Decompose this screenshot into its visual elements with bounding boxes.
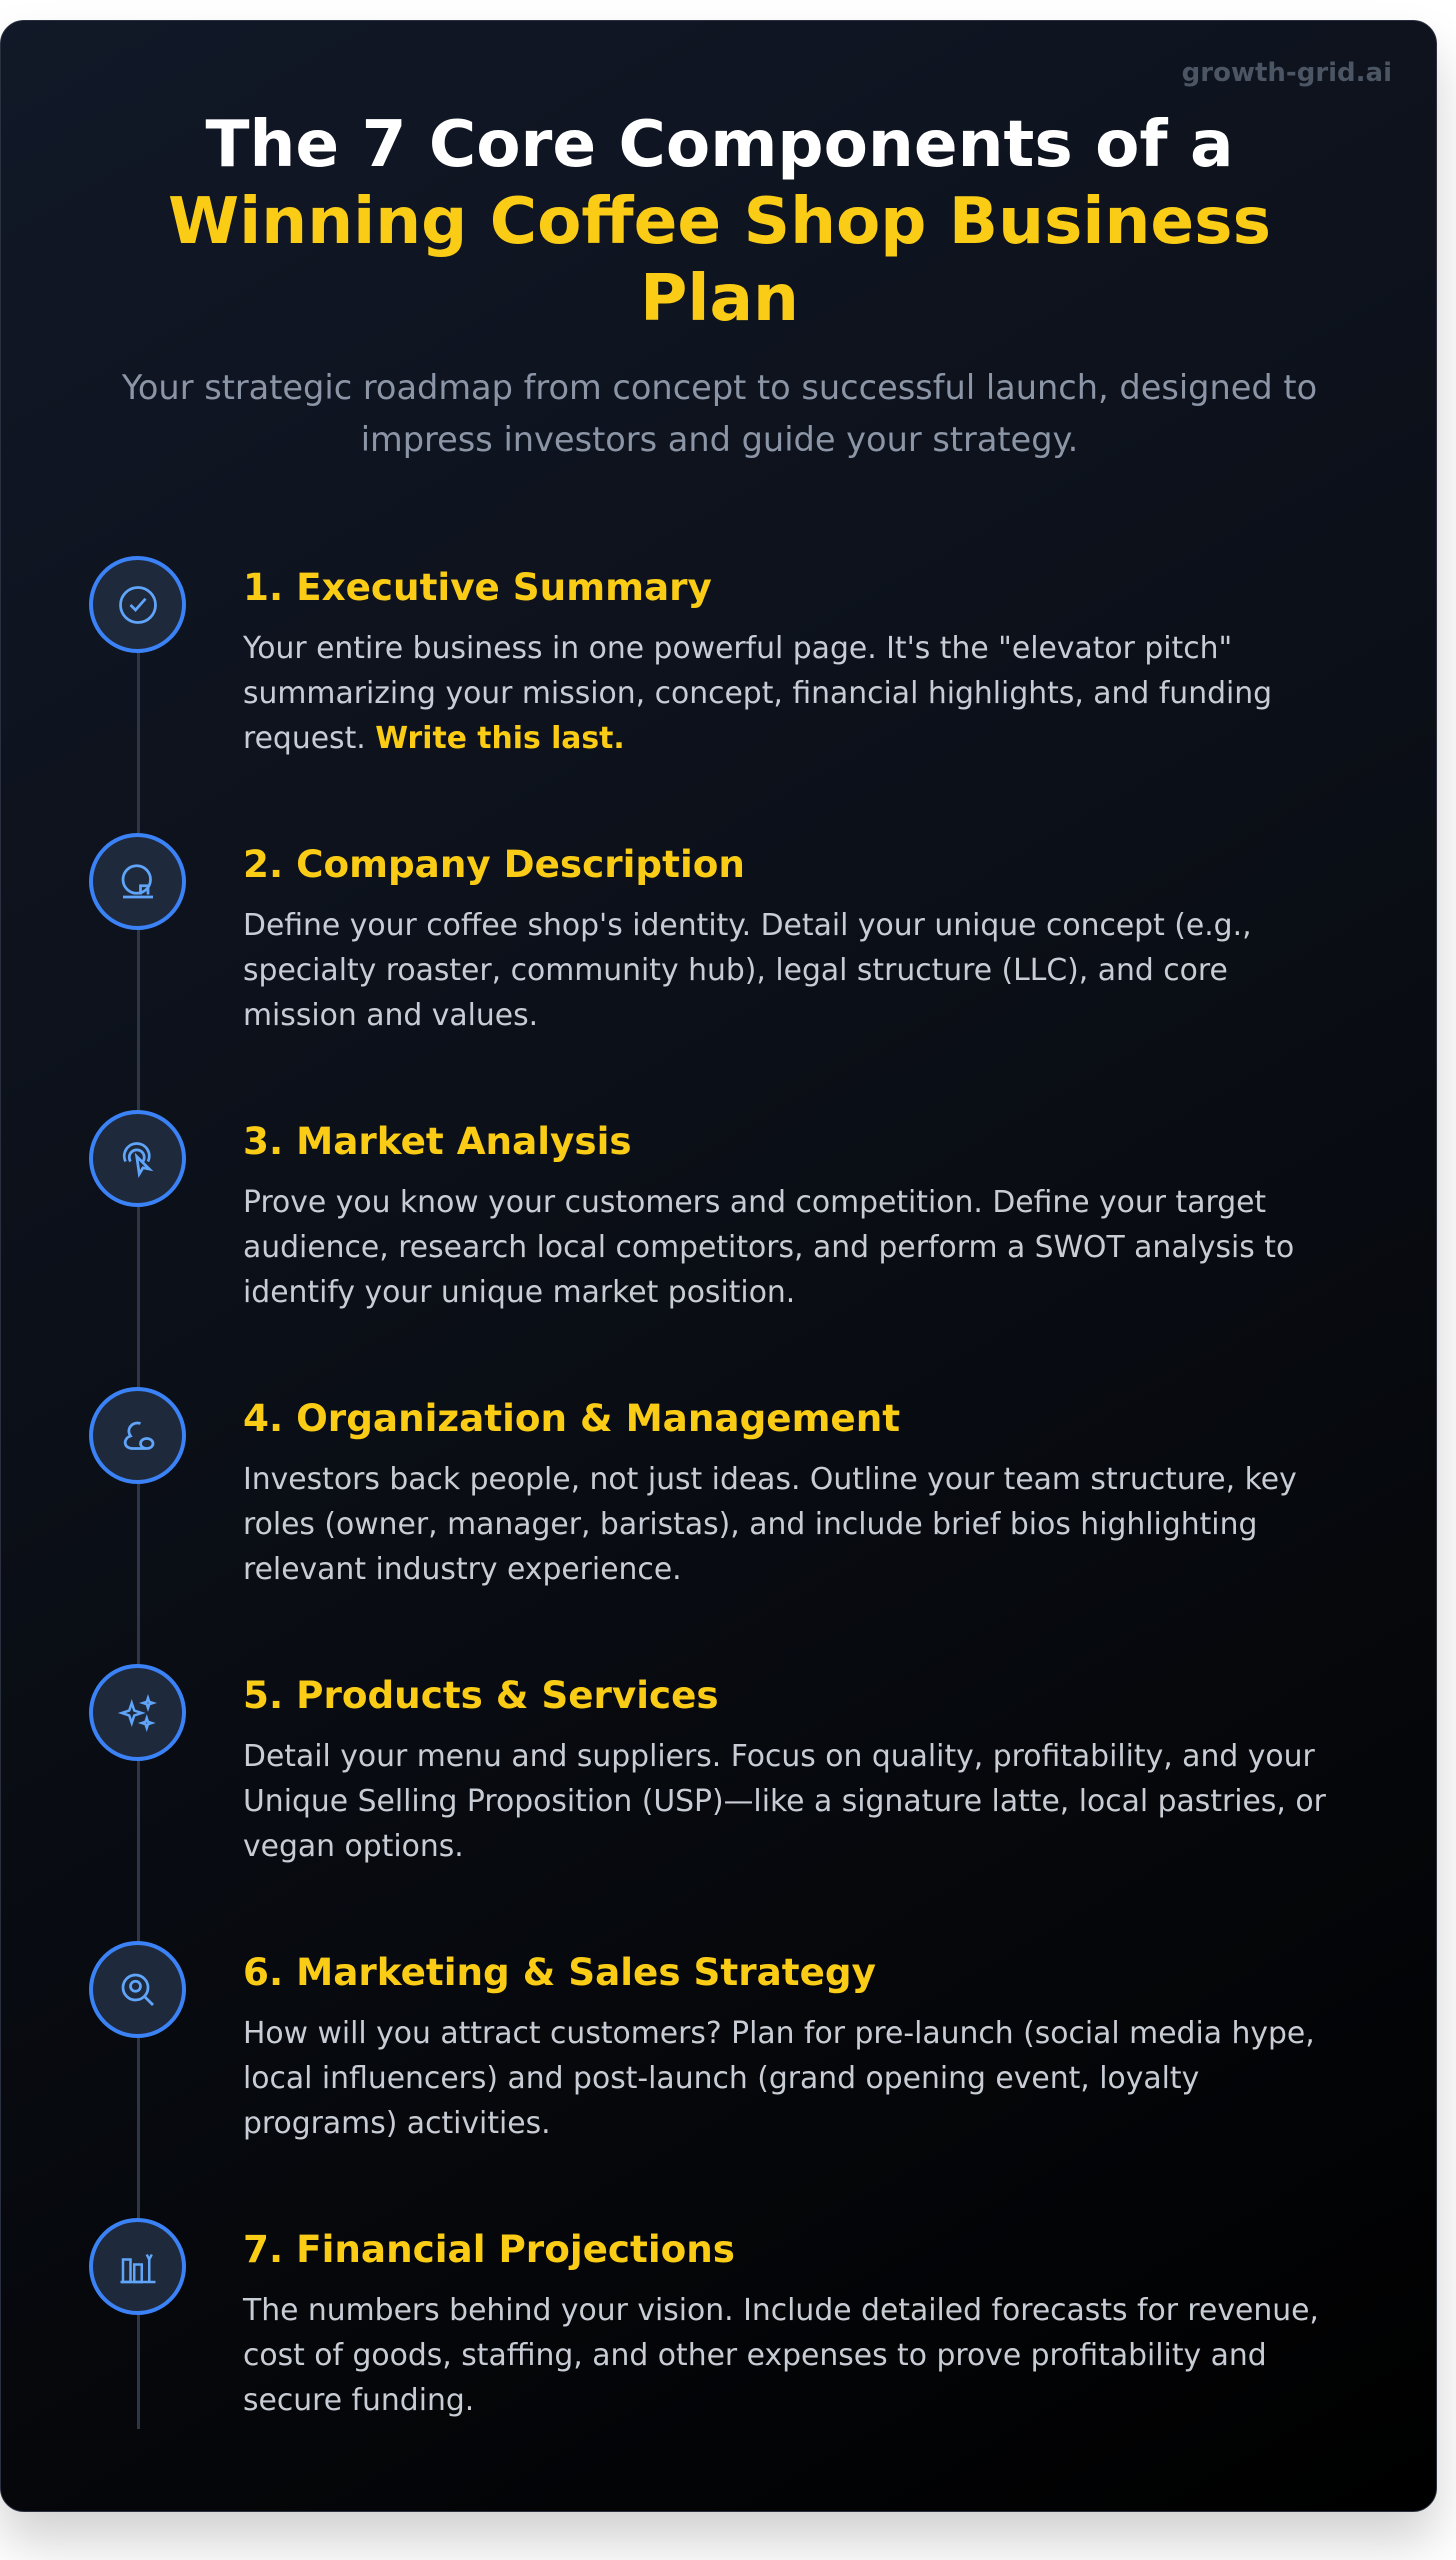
heading: 6. Marketing & Sales Strategy (243, 1950, 876, 1994)
title: Plan (640, 261, 799, 336)
heading: 2. Company Description (243, 842, 745, 886)
title (168, 107, 1271, 336)
heading: 7. Financial Projections (243, 2227, 735, 2271)
icon: people (89, 1387, 186, 1484)
icon: building (89, 833, 186, 930)
timeline line (137, 625, 140, 2429)
subtitle: Your strategic roadmap from concept to successful launch, designed to impress investors and guide your strategy. (122, 368, 1317, 459)
body: Investors back people, not just ideas. Outline your team structure, key roles (owner, manager, baristas), and include brief bios highlighting relevant industry experience. (243, 1462, 1297, 1587)
icon: target pointer (89, 1110, 186, 1207)
icon: magnifier (89, 1941, 186, 2038)
icon: check (89, 556, 186, 653)
item 6: marketing (89, 1941, 1315, 2141)
body: The numbers behind your vision. Include detailed forecasts for revenue, cost of goods, staffing, and other expenses to prove profitability and secure funding. (243, 2293, 1319, 2418)
body: Define your coffee shop's identity. Detail your unique concept (e.g., specialty roaster, community hub), legal structure (LLC), and core mission and values. (243, 908, 1252, 1033)
icon: sparkles (89, 1664, 186, 1761)
item 3: market analysis (89, 1110, 1294, 1310)
title: The 7 Core Components of a (205, 107, 1234, 182)
heading: 5. Products & Services (243, 1673, 719, 1717)
item 4: organization (89, 1387, 1297, 1587)
body: Prove you know your customers and competition. Define your target audience, research local competitors, and perform a SWOT analysis to identify your unique market position. (243, 1185, 1294, 1310)
body: Your entire business in one powerful page. It's the "elevator pitch" summarizing your mission, concept, financial highlights, and funding request. Write this last. (243, 631, 1272, 756)
item 7: financial (89, 2218, 1319, 2418)
item 5: products (89, 1664, 1326, 1864)
title: Winning Coffee Shop Business (168, 184, 1271, 259)
heading: 4. Organization & Management (243, 1396, 900, 1440)
body: How will you attract customers? Plan for pre-launch (social media hype, local influencers) and post-launch (grand opening event, loyalty programs) activities. (243, 2016, 1315, 2141)
item 1: executive summary (89, 556, 1272, 756)
watermark: growth-grid.ai (1182, 58, 1392, 88)
icon: chart (89, 2218, 186, 2315)
heading: 3. Market Analysis (243, 1119, 632, 1163)
heading: 1. Executive Summary (243, 565, 712, 609)
item 2: company description (89, 833, 1252, 1033)
body: Detail your menu and suppliers. Focus on quality, profitability, and your Unique Selling Proposition (USP)—like a signature latte, local pastries, or vegan options. (243, 1739, 1326, 1864)
